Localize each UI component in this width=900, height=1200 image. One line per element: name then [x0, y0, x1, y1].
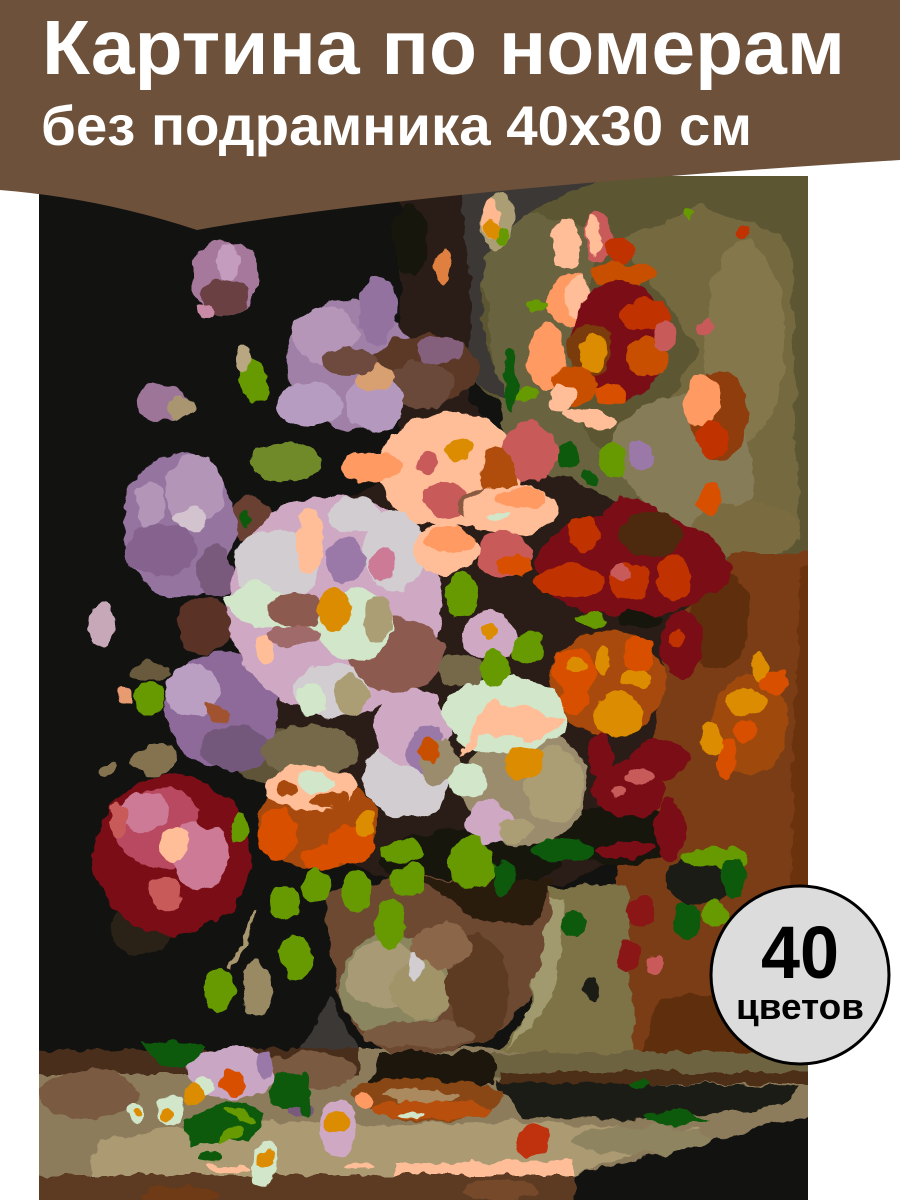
flower: deep red bloom [586, 733, 690, 975]
flower: peach bloom [342, 412, 558, 578]
title: Картина по номерам [42, 5, 845, 91]
badge: 40 colours: цветов [736, 986, 864, 1027]
flower: right orange bud [503, 300, 748, 517]
flower: large white and lilac bloom [222, 495, 443, 716]
green leaves [206, 442, 750, 1016]
flower: top orange and red bloom [528, 213, 675, 433]
top banner [0, 0, 900, 230]
subtitle: без подрамника 40х30 см [41, 94, 752, 157]
flower: left purple bloom [88, 453, 236, 647]
bottom bouquet [129, 1040, 548, 1187]
flower: dark red bloom [534, 498, 730, 679]
flower: top purple bud [191, 239, 259, 317]
vase [324, 879, 555, 1123]
flower: lower left purple bloom [100, 652, 278, 776]
flower: small top buds [435, 194, 746, 333]
flower: dark red and pink peony [94, 775, 250, 935]
table [20, 1049, 830, 1200]
flower: orange lower bloom [258, 724, 378, 870]
badge: 40 colours: 40 [761, 911, 839, 994]
painting [20, 165, 830, 1200]
flower: small purple bud with leaf [136, 346, 276, 421]
painting background: olive and brown wall [110, 165, 830, 1090]
flower: right orange cluster [701, 654, 790, 782]
badge: 40 colours [711, 886, 889, 1064]
flower: white and lilac lower bloom [363, 611, 588, 845]
flower: top purple bloom [277, 276, 480, 433]
flower: orange bloom [549, 631, 665, 737]
